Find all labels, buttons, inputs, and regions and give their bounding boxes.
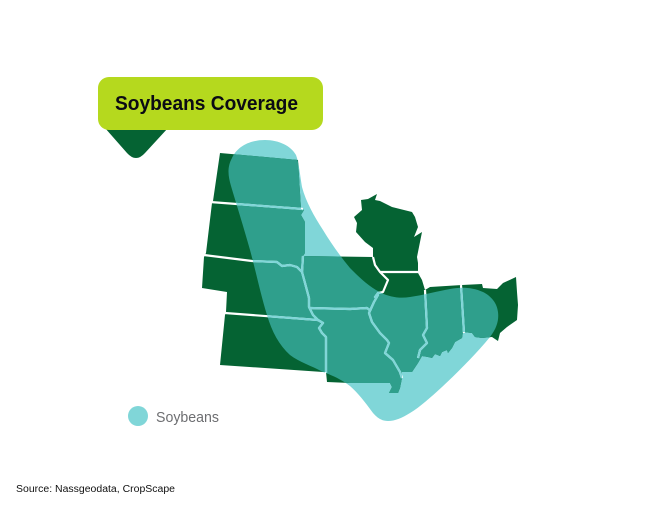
state borders outside coverage — [204, 202, 464, 378]
soybean coverage area — [228, 140, 498, 421]
overlap of coverage and states — [228, 154, 498, 393]
source note: Source: Nassgeodata, CropScape — [16, 484, 175, 495]
legend: soybeans — [128, 406, 219, 426]
callout pointer — [105, 128, 168, 158]
legend label: Soybeans — [156, 409, 219, 426]
states — [202, 153, 518, 393]
callout: title banner — [98, 77, 323, 158]
callout box — [98, 77, 323, 130]
infographic canvas — [16, 77, 518, 494]
legend swatch — [128, 406, 148, 426]
map: soybeans coverage over Midwest states — [202, 140, 518, 421]
title: Soybeans Coverage — [115, 93, 298, 115]
state borders inside coverage — [236, 202, 465, 378]
